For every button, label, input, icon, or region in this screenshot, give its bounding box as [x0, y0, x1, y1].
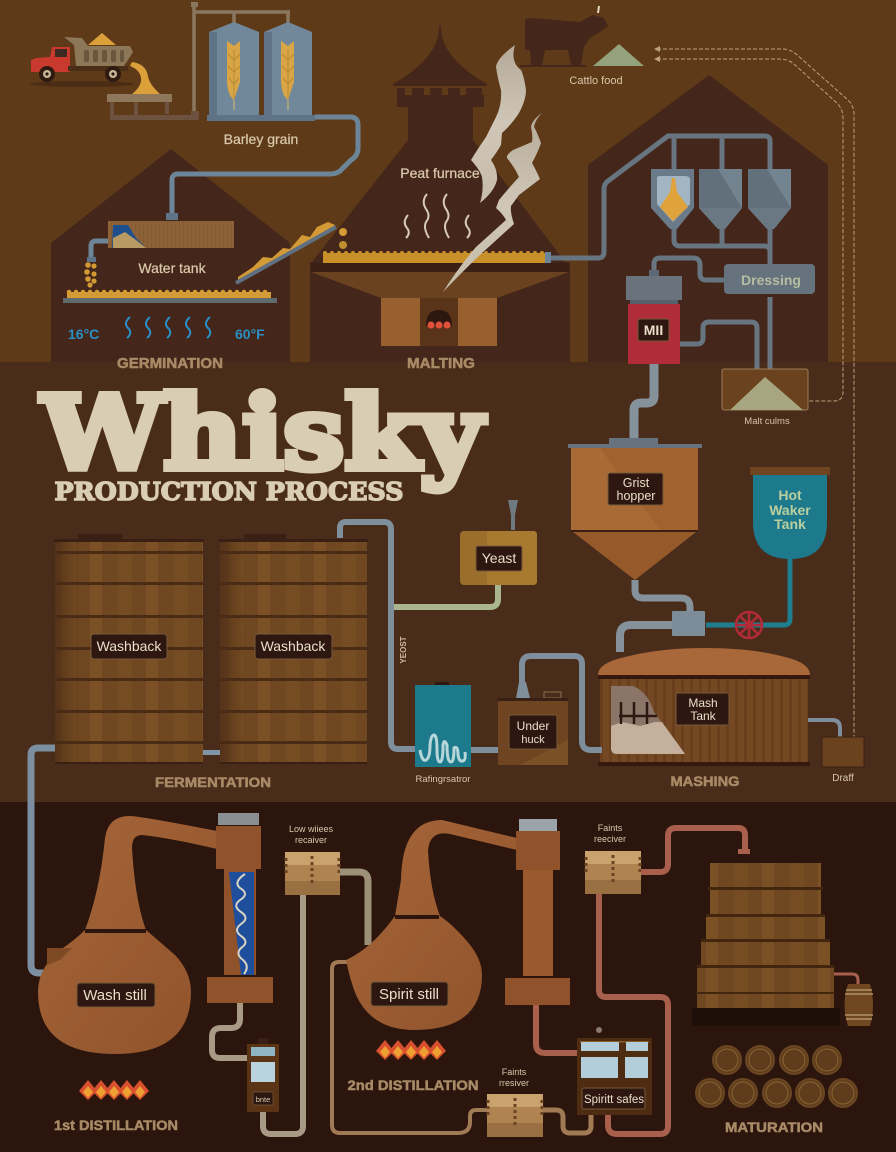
pipe: mixer to mash tank	[620, 625, 672, 652]
spirit safes	[577, 1027, 652, 1115]
icon: flames first distillation	[79, 1080, 149, 1100]
pipes under hoppers	[674, 229, 770, 265]
refrigerator	[415, 682, 471, 767]
spirit safe 1: bnte	[256, 1095, 270, 1104]
building: milling house	[588, 75, 828, 362]
wash still: Wash still	[83, 987, 147, 1004]
grist hopper: Grist	[623, 476, 650, 490]
grain dots	[339, 228, 347, 249]
label: malt culms: Malt culms	[744, 416, 790, 427]
title	[40, 374, 486, 506]
temperature: celsius: 16°C	[68, 326, 99, 342]
faints receiver top	[585, 851, 641, 894]
grist hopper	[568, 438, 702, 580]
pipe: safe 1 to low wines receiver	[263, 895, 303, 1134]
pipe: dressing to mill	[654, 258, 724, 280]
label: faints receiver bottom: Faints	[502, 1067, 527, 1077]
silos: barley grain	[207, 22, 315, 121]
spirit still: Spirit still	[379, 986, 439, 1003]
cold air waves	[126, 317, 210, 338]
pipe: mill to malt culms	[680, 322, 757, 370]
pipe: kiln to hoppers	[551, 136, 770, 258]
wash still	[38, 816, 217, 1054]
label: low wines receiver	[289, 824, 334, 845]
building: germination	[51, 149, 290, 362]
label: water tank: Water tank	[138, 260, 207, 276]
pipe: low wines to spirit still	[340, 872, 368, 945]
maturation vat	[692, 863, 840, 1026]
stacked barrel ends	[696, 1046, 857, 1107]
title main word: Whisky	[40, 374, 486, 492]
hopper 2	[699, 169, 742, 229]
icon: cow	[520, 6, 608, 67]
washback 2	[219, 534, 368, 764]
label: peat furnace: Peat furnace	[400, 165, 480, 181]
building: malting kiln	[310, 22, 570, 362]
under back: huck	[521, 734, 545, 746]
spirit safes: Spiritt safes	[584, 1094, 644, 1106]
icon: flames second distillation	[376, 1040, 446, 1060]
pipe: condenser 1 to safe	[212, 1003, 248, 1058]
mash tank	[598, 648, 810, 766]
icon: valve	[736, 612, 762, 638]
dashed line arrowheads	[654, 46, 660, 62]
heading: fermentation: FERMENTATION	[155, 775, 271, 790]
label: low wines receiver: recaiver	[295, 835, 327, 845]
water tank	[87, 213, 234, 262]
label: faints receiver top: Faints	[598, 823, 623, 833]
draff box	[822, 737, 864, 767]
pipe: receiver to spirit safes	[599, 894, 668, 1134]
heading: second distillation: 2nd DISTILLATION	[348, 1077, 478, 1093]
background: bottom band	[0, 802, 896, 1152]
label: faints receiver bottom	[499, 1067, 529, 1088]
vertical pipe label: YEOST	[399, 636, 408, 664]
hopper 1	[651, 169, 694, 229]
kiln funnel	[311, 272, 569, 298]
mash tank: Tank	[690, 709, 717, 723]
falling grain	[84, 262, 97, 288]
smoke plume 1	[471, 45, 526, 203]
under back	[498, 682, 568, 765]
pipe: washback to wash still	[31, 748, 55, 973]
dressing machine	[724, 264, 815, 294]
pipe: hot water	[706, 559, 790, 625]
pipe: refrigerator to washback	[340, 522, 415, 749]
germination floor	[63, 292, 277, 303]
heading: first distillation: 1st DISTILLATION	[54, 1117, 178, 1133]
pipe: yeast	[394, 585, 498, 607]
temperature: fahrenheit: 60°F	[235, 326, 265, 342]
mill	[626, 270, 682, 364]
pipe: mill to grist hopper	[634, 364, 654, 440]
icon: grain pour and loading table	[107, 62, 198, 120]
faints receiver bottom	[487, 1094, 543, 1137]
background: top band	[0, 0, 896, 362]
heading: germination: GERMINATION	[117, 355, 223, 372]
label: draff: Draff	[832, 773, 854, 784]
label: cattle food: Cattlo food	[569, 75, 623, 87]
steam wisps	[405, 194, 470, 238]
cutaway	[611, 686, 685, 754]
yeast tank: Yeast	[482, 550, 516, 566]
pipe: silo to water tank	[172, 117, 358, 215]
smoke plume 2	[443, 113, 542, 292]
pipe: receiver to maturation	[641, 828, 745, 872]
under back: Under	[517, 719, 549, 733]
pipe: mash to draff	[808, 720, 840, 738]
pipe: grist to mixer	[635, 580, 690, 612]
hoppers	[651, 169, 791, 229]
yeast tank	[460, 500, 537, 585]
kiln grain bed	[311, 252, 569, 272]
low wines receiver	[285, 852, 340, 895]
malt culms bin	[722, 369, 808, 410]
label: barley grain: Barley grain	[224, 131, 298, 147]
hot water tank: Waker	[769, 502, 811, 518]
mill: MII	[644, 322, 663, 338]
label: faints receiver top	[594, 823, 626, 844]
condenser 1	[207, 813, 273, 1003]
pipe: condenser 2 to spirit safes	[536, 1005, 577, 1053]
label: low wines receiver: Low wiiees	[289, 824, 334, 834]
furnace opening	[420, 298, 458, 346]
washback 1	[54, 534, 204, 764]
pipe: under back to mash tank	[522, 656, 602, 750]
conveyor to kiln	[236, 222, 336, 283]
label: faints receiver bottom: rresiver	[499, 1078, 529, 1088]
elevator pipe	[191, 2, 290, 119]
pipe: faints to spirit still	[332, 962, 487, 1133]
title subtitle: PRODUCTION PROCESS	[54, 477, 404, 506]
heading: malting: MALTING	[407, 355, 475, 372]
hopper 3	[748, 169, 791, 229]
spirit still	[346, 820, 517, 1030]
washback 1: Washback	[97, 638, 162, 654]
furnace bricks	[381, 298, 497, 346]
icon: wheat ear right	[281, 41, 294, 110]
pipe: vat to barrel	[834, 974, 858, 984]
label: faints receiver top: reeciver	[594, 834, 626, 844]
heading: maturation: MATURATION	[725, 1119, 823, 1135]
dashed return lines	[657, 49, 854, 737]
icon: wheat ear left	[227, 41, 240, 110]
pipe nozzle	[738, 849, 750, 854]
condenser 2	[505, 819, 570, 1005]
washback 2: Washback	[261, 638, 326, 654]
mixer box	[672, 611, 705, 636]
pipe: dressing to malt culms	[768, 297, 772, 370]
dressing machine: Dressing	[741, 272, 801, 288]
mash tank: Mash	[688, 696, 718, 710]
heading: mashing: MASHING	[670, 773, 740, 789]
background: middle band	[0, 362, 896, 802]
pipe: between washbacks	[203, 750, 220, 755]
pipe: refrigerator to under back	[471, 747, 499, 753]
grist hopper: hopper	[617, 489, 655, 503]
hot water tank: Hot	[778, 487, 802, 503]
icon: barrel	[844, 984, 873, 1026]
hot water tank: Tank	[774, 516, 806, 532]
cattle food pile	[593, 44, 644, 66]
spirit safe 1	[247, 1038, 279, 1112]
hot water tank	[750, 467, 830, 559]
label: refrigerator: Rafingrsatror	[416, 774, 470, 785]
pipe: faints to safes	[543, 1110, 591, 1133]
icon: dump truck	[30, 33, 134, 87]
